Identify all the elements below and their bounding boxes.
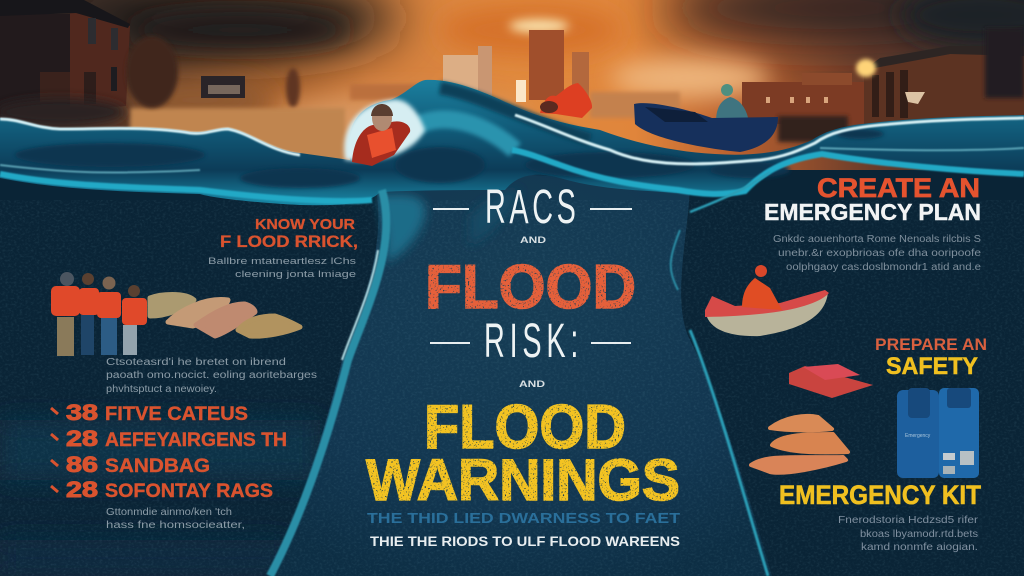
illustration: stacked orange sandbags	[751, 416, 848, 473]
text: kit description: Fnerodstoria Hcdzsd5 rifer	[838, 515, 979, 526]
list row 2: 28	[66, 426, 98, 451]
building: left brick house	[0, 0, 130, 114]
list row 1: 38	[66, 400, 98, 425]
title: first and: AND	[520, 235, 547, 245]
illustration: red folded bags	[789, 364, 873, 398]
water texture	[0, 200, 1024, 576]
heading: know your flood risk: F LOOD RRICK,	[220, 232, 358, 251]
list row 4: SOFONTAY RAGS	[105, 481, 273, 502]
text: list caption	[106, 507, 245, 531]
heading: prepare an safety: PREPARE AN	[875, 335, 987, 354]
right small streak	[671, 230, 680, 290]
illustration: row of sandbags	[150, 294, 300, 336]
distant city towers	[443, 30, 589, 102]
water reflection right of boat	[778, 116, 848, 142]
text: kit description	[838, 515, 979, 553]
heading: know your flood risk: KNOW YOUR	[255, 216, 355, 233]
text: sandbag description: phvhtsptuct a newoiey.	[106, 384, 217, 395]
text: plan description: Gnkdc aouenhorta Rome Nenoals rilcbis S	[773, 234, 981, 245]
list row 1	[51, 400, 248, 425]
title: FLOOD orange: FLOOD	[425, 253, 636, 322]
title: second and: AND	[519, 379, 546, 389]
list row 1: FITVE CATEUS	[105, 404, 248, 425]
heading: create an emergency plan: CREATE AN	[817, 173, 980, 203]
right surface streak	[690, 172, 770, 212]
text: plan description	[773, 234, 982, 273]
panel: cross-section wave	[0, 80, 1024, 205]
list row 2	[51, 426, 287, 451]
list row 2: AEFEYAIRGENS TH	[105, 430, 287, 451]
panel: central submerged column	[270, 170, 772, 576]
heading: prepare an safety: SAFETY	[886, 353, 978, 380]
title: RACS: RACS	[485, 181, 579, 234]
title: FLOOD yellow: FLOOD	[424, 393, 626, 462]
text: sandbag description: Ctsoteasrd'i he bretet on ibrend	[106, 357, 286, 368]
text: list caption: hass fne homsocieatter,	[106, 520, 245, 531]
heading: create an emergency plan: EMERGENCY PLAN	[764, 199, 981, 225]
heading: prepare an safety	[875, 335, 987, 380]
orange rubble	[350, 84, 440, 100]
right large building	[864, 28, 1024, 124]
column edge: right cyan current	[690, 330, 768, 576]
list: kit statistics	[51, 400, 287, 502]
column edge: bright core	[342, 250, 378, 360]
foam lower lines	[0, 148, 1024, 172]
text: flood risk intro	[208, 256, 356, 280]
distant rubble line	[590, 92, 680, 118]
right brick block	[742, 73, 864, 124]
text: list caption: Gttonmdie ainmo/ken 'tch	[106, 507, 232, 518]
title: RISK: RISK:	[484, 315, 583, 368]
tree	[126, 36, 178, 108]
panel: fiery storm sky	[0, 0, 1024, 210]
text: sandbag description	[106, 357, 317, 395]
list row 4	[51, 477, 273, 502]
subtitle: blue line: THE THID LIED DWARNESS TO FAET	[367, 510, 680, 527]
wave foam crest	[0, 115, 1024, 164]
heading: know your flood risk	[220, 216, 358, 251]
foam around swimmer	[344, 99, 425, 161]
wave cyan underside	[0, 150, 1024, 201]
subtitle: white line: THIE THE RIODS TO ULF FLOOD WAREENS	[370, 534, 680, 549]
text: flood risk intro: cleening jonta lmiage	[235, 269, 356, 280]
panel: deep water background	[0, 170, 1024, 576]
title block	[366, 181, 680, 549]
figure: red-clad rescuer	[540, 83, 592, 118]
panel: flooded skyline	[0, 0, 1024, 168]
text: flood risk intro: Ballbre mtatneartlesz lChs	[208, 256, 356, 267]
list row 3: 86	[66, 452, 98, 477]
text: plan description: oolphgaoy cas:doslbmondr1 atid and.e	[786, 262, 981, 273]
flood spray on left	[0, 98, 125, 126]
panel: blue boat with person	[634, 84, 778, 152]
crest teal highlight	[405, 119, 515, 150]
column edge: left cyan current	[270, 190, 386, 576]
heading: emergency kit: EMERGENCY KIT	[779, 480, 981, 510]
text: plan description: unebr.&r exopbrioas ofe dha ooripoofe	[778, 248, 982, 259]
illustration: group in red jackets	[51, 272, 147, 356]
list row 3: SANDBAG	[105, 456, 210, 477]
list row 4: 28	[66, 477, 98, 502]
text: kit description: kamd nonmfe aiogian.	[861, 542, 978, 553]
figure: swimmer in red vest	[352, 104, 410, 166]
glow behind right building	[856, 59, 876, 77]
illustration: blue emergency kit containers: Emergency	[905, 433, 931, 439]
ground reflection left of swimmer	[130, 108, 345, 168]
list row 3	[51, 452, 210, 477]
text: sandbag description: paoath omo.nocict. eoling aoritebarges	[106, 370, 317, 381]
crest dark shoulder	[440, 88, 590, 140]
title: WARNINGS: WARNINGS	[366, 448, 680, 513]
heading: create an emergency plan	[764, 173, 981, 225]
wave dark inner troughs	[15, 129, 884, 188]
small distant house	[201, 76, 245, 98]
illustration: blue emergency kit containers	[897, 388, 979, 478]
text: kit description: bkoas lbyamodr.rtd.bets	[860, 529, 978, 540]
teal streaks below crest	[378, 190, 520, 262]
illustration: red rescue boat	[705, 265, 829, 336]
